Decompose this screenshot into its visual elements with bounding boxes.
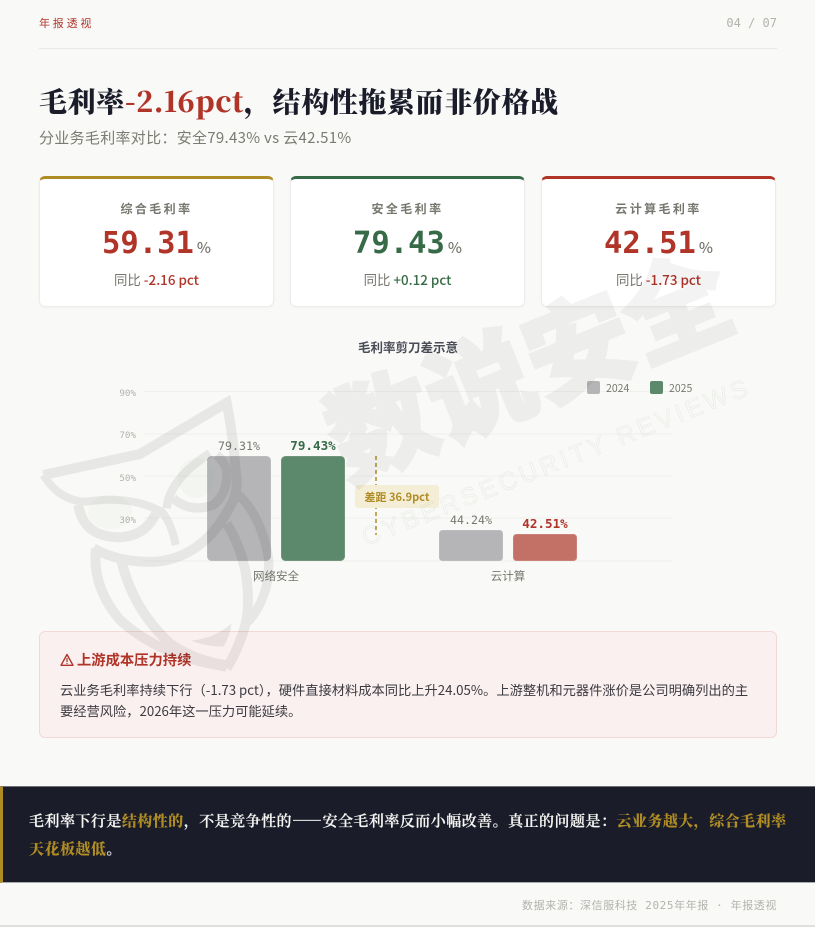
- watermark: english line: CYBERSECURITY REVIEWS: [358, 373, 755, 552]
- panel: KPI security gross margin: [290, 176, 525, 307]
- y axis labels: 70%: [119, 430, 136, 441]
- chart title: 毛利率剪刀差示意: [358, 337, 458, 356]
- bars: network security: 79.31%: [218, 439, 260, 453]
- y axis labels: 50%: [119, 473, 136, 484]
- bars: cloud computing: 44.24%: [450, 513, 492, 527]
- watermark: owl: [43, 403, 269, 668]
- card label: 云计算毛利率: [615, 200, 702, 217]
- bars: network security: 79.43%: [290, 438, 336, 453]
- legend: 2025: [669, 381, 692, 396]
- legend: [587, 381, 692, 396]
- bars: cloud computing: 42.51%: [522, 516, 568, 531]
- footer source: 数据来源：深信服科技 2025年年报 · 年报透视: [522, 899, 777, 912]
- bars: network security: [208, 438, 344, 584]
- subtitle: 分业务毛利率对比：安全79.43% vs 云42.51%: [39, 127, 352, 148]
- panel: KPI cloud gross margin: [541, 176, 776, 307]
- card label: 安全毛利率: [371, 200, 444, 217]
- gap marker: [355, 456, 439, 535]
- y axis labels: [119, 388, 136, 526]
- conclusion band: [0, 786, 815, 883]
- panel: KPI combined gross margin: [39, 176, 274, 307]
- card value: 79.43%: [353, 226, 462, 261]
- conclusion band: 天花板越低。: [29, 838, 122, 859]
- page number: 04 / 07: [726, 16, 777, 30]
- panel: risk callout: [39, 631, 777, 738]
- callout body: 要经营风险，2026年这一压力可能延续。: [60, 701, 301, 720]
- callout body: [60, 680, 748, 720]
- card value: 59.31%: [102, 226, 211, 261]
- title: 毛利率-2.16pct，结构性拖累而非价格战: [39, 81, 559, 121]
- card label: 综合毛利率: [120, 200, 192, 217]
- header label: 年报透视: [39, 15, 94, 31]
- card change: 同比 +0.12 pct: [364, 269, 451, 289]
- y axis labels: 90%: [119, 388, 136, 399]
- y axis labels: 30%: [119, 515, 136, 526]
- bar chart: [119, 381, 692, 584]
- watermark: eye tints: [88, 458, 214, 529]
- icon: warning triangle: [60, 654, 74, 666]
- watermark: brand name: 数说安全: [301, 209, 752, 511]
- bars: network security: 网络安全: [253, 568, 299, 584]
- card change: 同比 -1.73 pct: [616, 269, 701, 289]
- bars: cloud computing: [440, 513, 576, 584]
- callout heading: 上游成本压力持续: [77, 649, 191, 670]
- conclusion band: 毛利率下行是结构性的，不是竞争性的——安全毛利率反而小幅改善。真正的问题是：云业务越大，综合毛利率: [29, 810, 787, 831]
- bars: cloud computing: 云计算: [491, 568, 525, 584]
- callout body: 云业务毛利率持续下行（-1.73 pct），硬件直接材料成本同比上升24.05%。上游整机和元器件涨价是公司明确列出的主: [60, 680, 748, 699]
- card value: 42.51%: [604, 226, 713, 261]
- legend: 2024: [606, 381, 629, 396]
- gap marker: 差距 36.9pct: [365, 489, 430, 505]
- card change: 同比 -2.16 pct: [114, 269, 199, 289]
